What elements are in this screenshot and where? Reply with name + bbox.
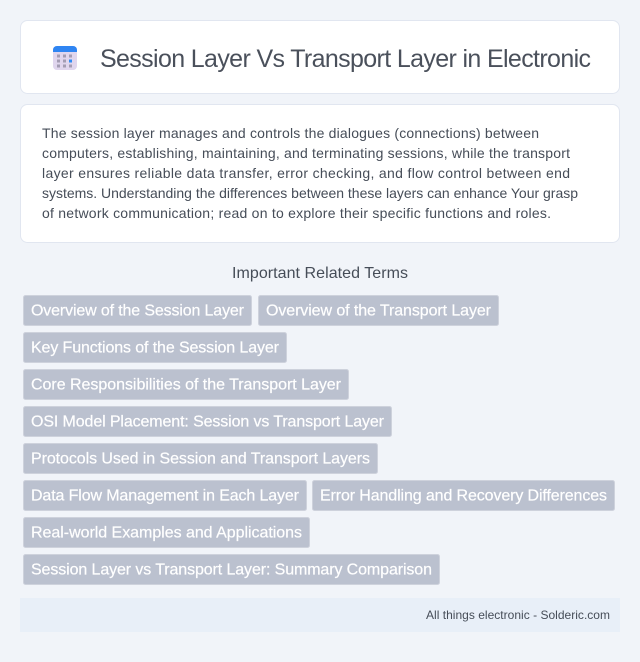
tag: osi model placement: OSI Model Placement: Session vs Transport Layer — [31, 414, 385, 430]
description text: systems. Understanding the differences between these layers can enhance Your grasp — [42, 185, 578, 201]
tag: data flow — [24, 480, 306, 510]
tag: error handling — [312, 480, 614, 510]
tag: summary comparison: Session Layer vs Transport Layer: Summary Comparison — [31, 562, 432, 578]
heading: important related terms: Important Related Terms — [232, 265, 408, 282]
tag: overview of session layer: Overview of the Session Layer — [31, 302, 245, 320]
tag list — [24, 296, 614, 584]
tag: error handling: Error Handling and Recovery Differences — [320, 488, 607, 504]
tag: overview of transport layer — [258, 296, 498, 326]
tag: protocols: Protocols Used in Session and Transport Layers — [31, 450, 370, 468]
description text: of network communication; read on to explore their specific functions and roles. — [42, 205, 551, 221]
tag: overview of session layer — [24, 296, 252, 326]
tag: protocols — [24, 444, 378, 474]
tag: core responsibilities — [24, 370, 348, 400]
tag: data flow: Data Flow Management in Each Layer — [31, 488, 300, 504]
tag: core responsibilities: Core Responsibilities of the Transport Layer — [31, 376, 342, 394]
footer — [20, 598, 620, 632]
tag: summary comparison — [24, 554, 440, 584]
tag: key functions: Key Functions of the Session Layer — [31, 340, 280, 356]
title panel — [20, 20, 620, 94]
tag: key functions — [24, 332, 286, 362]
title: Session Layer Vs Transport Layer in Electronic — [100, 45, 591, 73]
description text: The session layer manages and controls the dialogues (connections) between — [42, 125, 539, 141]
description text: layer ensures reliable data transfer, error checking, and flow control between end — [42, 165, 570, 181]
icon: calendar — [53, 46, 77, 70]
tag: real-world examples: Real-world Examples and Applications — [31, 524, 302, 542]
footer text: All things electronic - Solderic.com — [426, 608, 610, 622]
tag: osi model placement — [24, 406, 392, 436]
tag: overview of transport layer: Overview of the Transport Layer — [266, 302, 492, 320]
tag: real-world examples — [24, 518, 310, 548]
description text: computers, establishing, maintaining, and terminating sessions, while the transport — [42, 145, 570, 161]
panel: description — [20, 104, 620, 242]
